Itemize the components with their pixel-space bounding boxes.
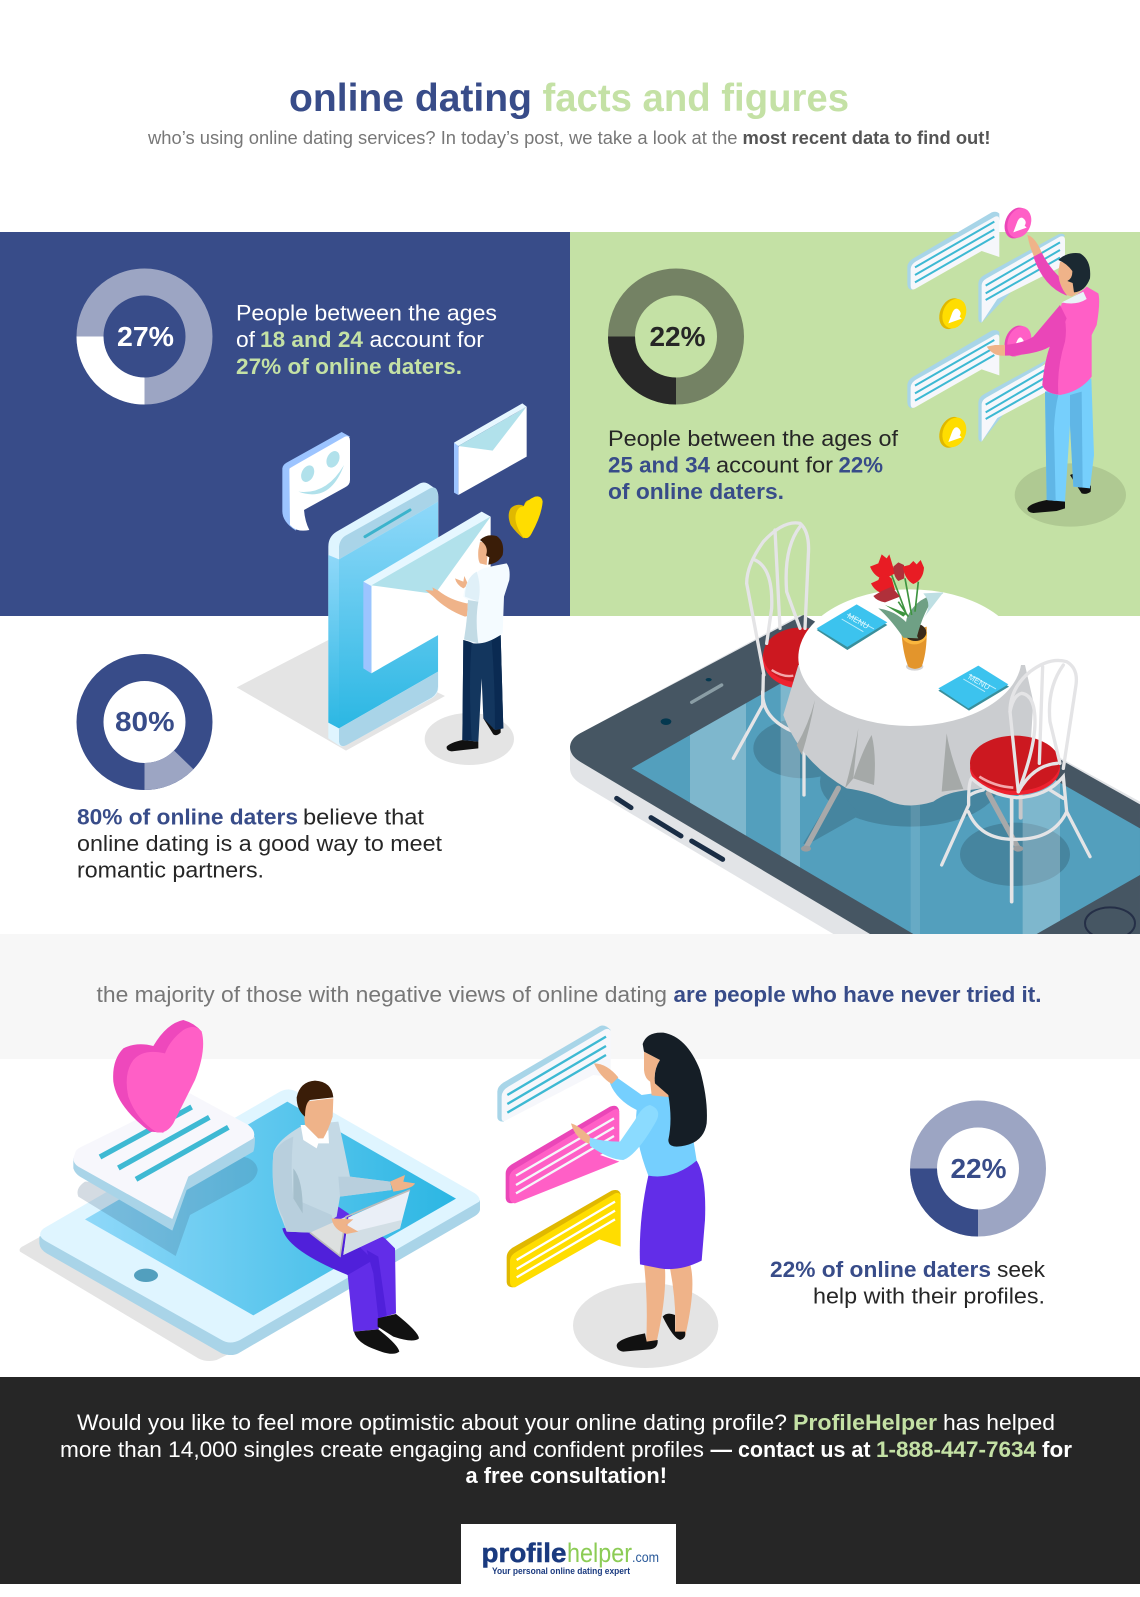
- donut chart: 27%: [90, 282, 199, 391]
- text: 18 to 24 age group: People between the ages: [236, 300, 497, 326]
- title: facts and figures: [542, 77, 849, 120]
- tulips: [870, 554, 924, 602]
- logo: Your personal online dating expert: [492, 1566, 631, 1577]
- tablecloth: [783, 665, 1033, 805]
- man: [273, 1081, 419, 1354]
- bubble shadow: [77, 1157, 258, 1256]
- footer text: [60, 1410, 1072, 1488]
- yellow heart: [509, 496, 543, 538]
- table top: [798, 589, 1022, 726]
- text: 80 percent believe: online dating is a good way to meet: [77, 831, 442, 856]
- ground shadow of phone: [237, 640, 445, 751]
- text: seek help: 22% of online daters: [770, 1257, 991, 1282]
- panel: gray statement band: [0, 934, 1140, 1059]
- tablet shadow: [20, 1235, 237, 1361]
- chat bubble: [73, 1093, 255, 1231]
- menu right: MENU: [967, 672, 992, 692]
- illustration: man arranging chat bubbles: [907, 204, 1126, 527]
- donut chart: 80%: 80%: [115, 706, 175, 737]
- text: seek help: help with their profiles.: [813, 1284, 1045, 1308]
- ground shadow: [573, 1283, 718, 1368]
- tablet sensors and buttons: [617, 678, 1135, 939]
- text: 80 percent believe: 80% of online daters: [77, 804, 298, 830]
- footer text: has helped: [943, 1410, 1055, 1435]
- panel: blue background: [0, 232, 570, 616]
- donut chart: 22% on white: 22%: [950, 1153, 1007, 1184]
- footer text: Would you like to feel more optimistic about your online dating profile?: [77, 1410, 787, 1435]
- title: online dating: [289, 77, 532, 120]
- woman: [571, 1033, 707, 1352]
- tablecloth folds: [797, 700, 963, 792]
- title: [289, 77, 849, 120]
- text: 18 to 24 age group: [236, 300, 497, 379]
- footer text: for: [1042, 1437, 1072, 1462]
- donut chart: 80%: [90, 668, 199, 777]
- text: 80 percent believe: romantic partners.: [77, 858, 264, 882]
- footer text: — contact us at: [710, 1437, 871, 1462]
- text: 18 to 24 age group: 18 and 24: [260, 327, 364, 352]
- statement text: are people who have never tried it.: [674, 982, 1042, 1007]
- donut chart: 22% on green: 22%: [650, 321, 706, 352]
- panel: footer: [0, 1377, 1140, 1584]
- donut chart: 22% on green: [622, 282, 730, 391]
- text: 25 to 34 age group: 25 and 34: [608, 452, 711, 478]
- menu left: [817, 604, 887, 650]
- text: 18 to 24 age group: of: [236, 327, 256, 352]
- text: 25 to 34 age group: account for: [716, 452, 833, 478]
- text: 25 to 34 age group: 22%: [838, 452, 883, 478]
- footer text: more than 14,000 singles create engaging and confident profiles: [60, 1437, 704, 1462]
- table legs: [801, 788, 1023, 852]
- man: [425, 535, 510, 751]
- ground shadow of man: [425, 713, 514, 765]
- smiley speech bubble: [282, 432, 350, 531]
- illustration: woman with chat bubbles: [497, 1026, 718, 1368]
- text: seek help: seek: [997, 1257, 1046, 1282]
- chair right: [942, 660, 1090, 902]
- donut chart: 27%: 27%: [117, 321, 174, 352]
- man: [987, 235, 1099, 513]
- phone: [328, 482, 438, 746]
- statement text: the majority of those with negative views of online dating: [96, 982, 667, 1007]
- yellow chat bubble: [507, 1190, 621, 1287]
- blue chat bubble: [497, 1026, 611, 1122]
- illustration: man with phone and envelope: [237, 403, 543, 765]
- tablet screen: [632, 684, 1140, 934]
- menu right: [938, 666, 1009, 711]
- text: 25 to 34 age group: [608, 426, 899, 504]
- coin icons: [935, 204, 1036, 451]
- logo: profile: [482, 1538, 566, 1568]
- chat bubbles: [907, 212, 1065, 442]
- footer text: a free consultation!: [466, 1463, 667, 1488]
- illustration: man sitting on tablet with laptop: [20, 1020, 480, 1361]
- footer text: ProfileHelper: [793, 1410, 937, 1435]
- illustration: table on tablet: [570, 523, 1140, 939]
- chair left: [732, 521, 810, 797]
- donut chart: 22% on white: [924, 1114, 1032, 1223]
- panel: green background: [570, 232, 1140, 616]
- pink chat bubble: [506, 1106, 619, 1203]
- logo: [461, 1524, 676, 1584]
- pink heart: [113, 1020, 203, 1133]
- text: 18 to 24 age group: account for: [370, 327, 484, 352]
- large envelope: [363, 512, 491, 673]
- subtitle: most recent data to find out!: [742, 127, 990, 148]
- tablet: [39, 1089, 480, 1355]
- logo: .com: [632, 1549, 659, 1565]
- footer text: 1-888-447-7634: [876, 1437, 1037, 1462]
- text: 18 to 24 age group: 27% of online daters.: [236, 354, 462, 379]
- logo: helper: [567, 1538, 632, 1568]
- text: seek help: [770, 1257, 1046, 1308]
- small envelope: [454, 403, 527, 495]
- text: 25 to 34 age group: People between the ages of: [608, 426, 899, 451]
- flower vase: [870, 554, 943, 671]
- text: 25 to 34 age group: of online daters.: [608, 479, 784, 504]
- statement text: [96, 982, 1042, 1007]
- text: 80 percent believe: [77, 804, 442, 882]
- text: 80 percent believe: believe that: [303, 804, 424, 830]
- ground shadow: [1015, 463, 1126, 527]
- menu left: MENU: [846, 611, 871, 631]
- subtitle: who’s using online dating services? In today’s post, we take a look at the: [147, 127, 737, 148]
- tablet body: [570, 615, 1140, 934]
